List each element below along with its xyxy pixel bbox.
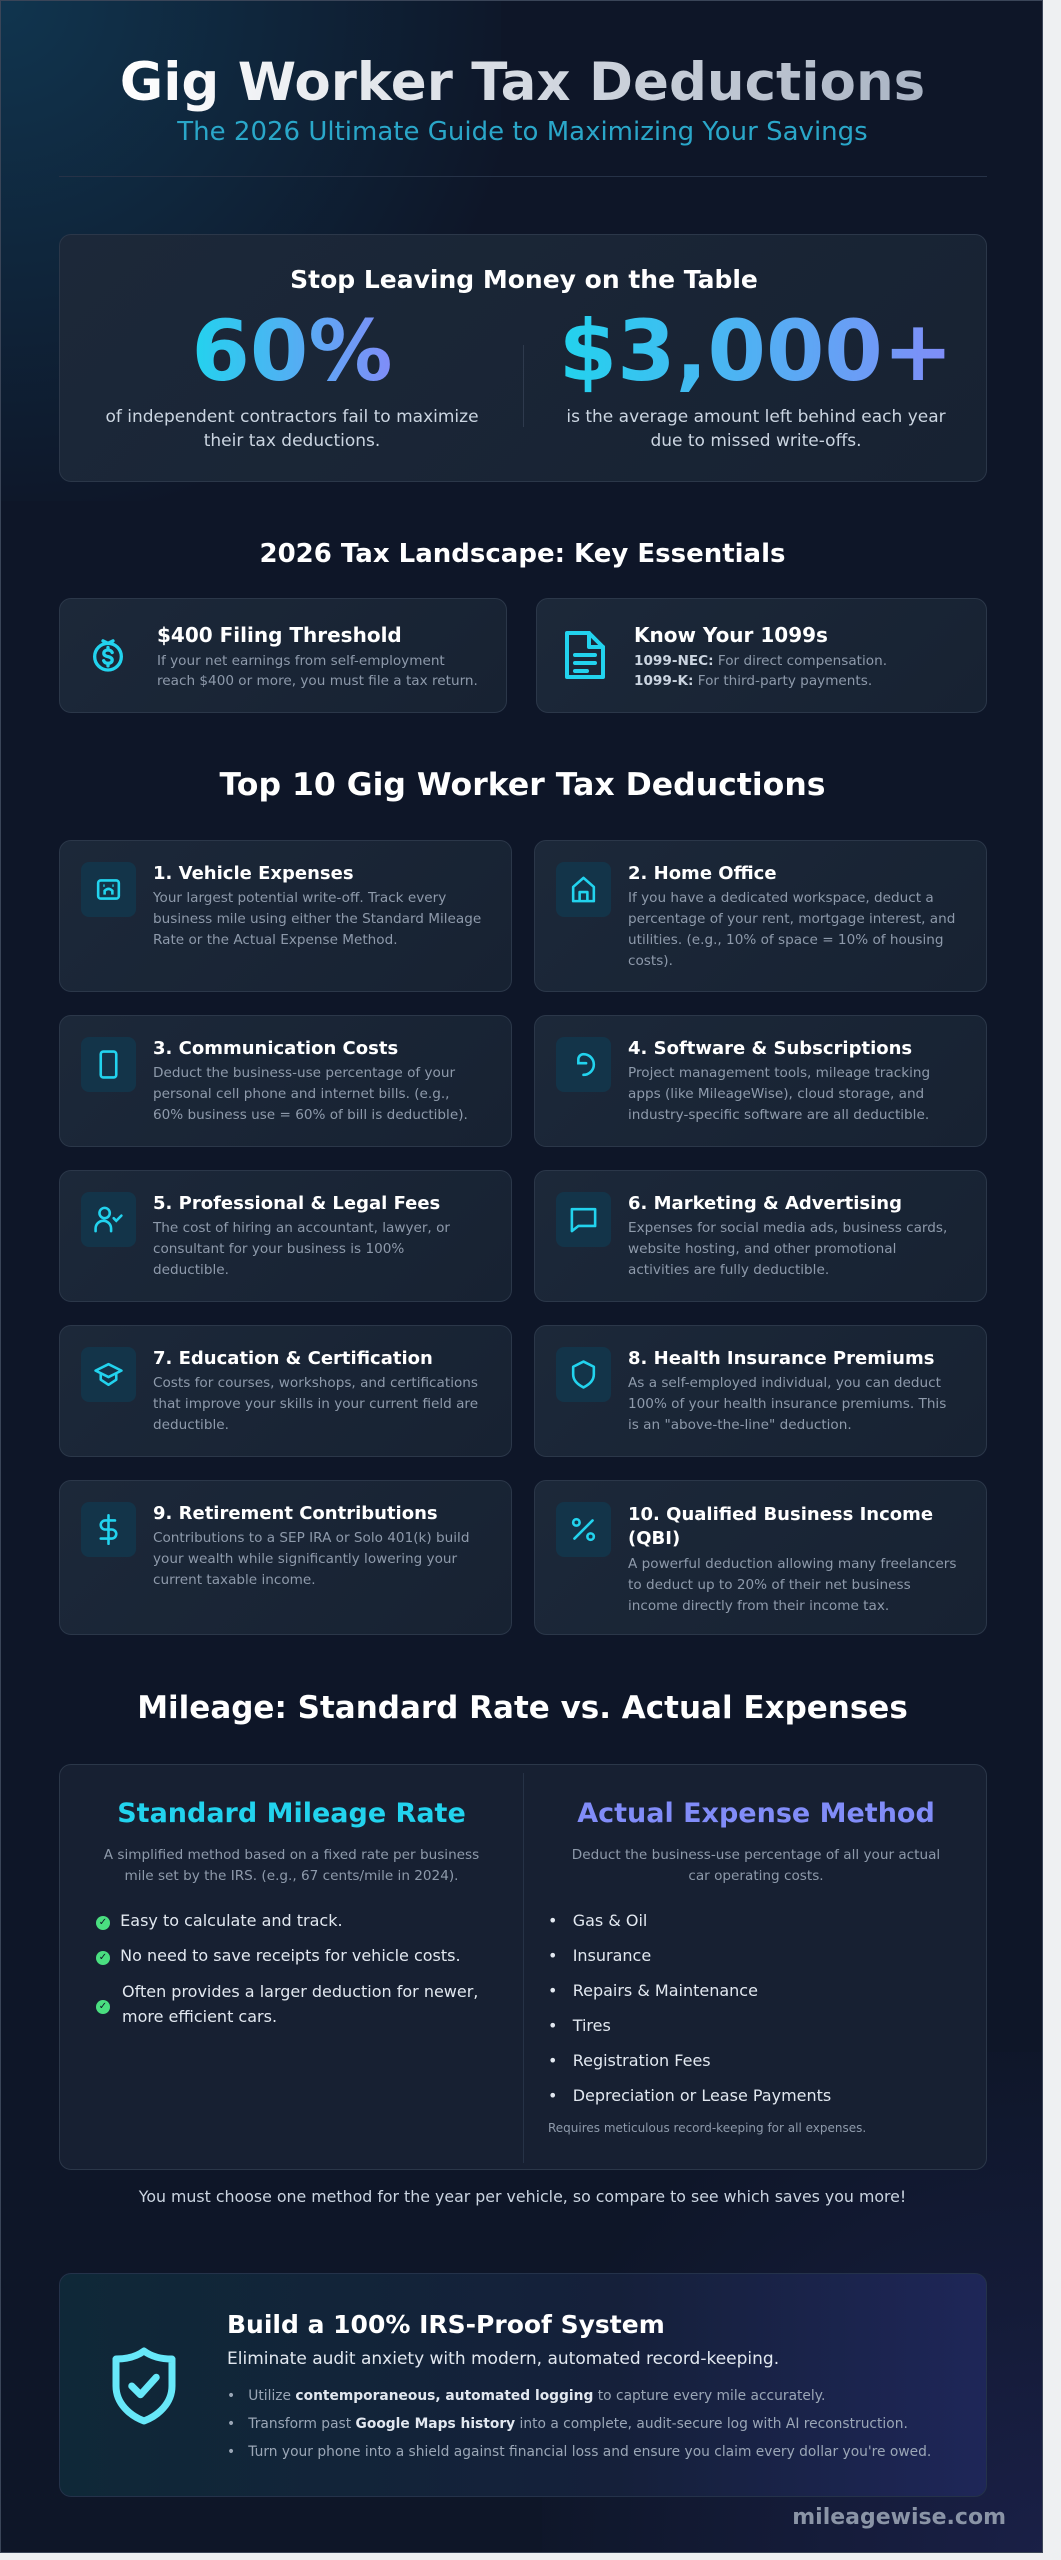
card 4: software xyxy=(534,1015,987,1147)
icon: speech bubble xyxy=(556,1192,611,1247)
card 5: professional: deductible. xyxy=(153,1262,229,1278)
heading: mileage: Mileage: Standard Rate vs. Actual Expenses xyxy=(137,1690,908,1726)
expense list xyxy=(548,1911,831,2105)
footer brand: mileagewise.com xyxy=(792,2505,1006,2530)
card: 1099s: Know Your 1099s xyxy=(634,623,828,647)
checklist: ✓ xyxy=(99,2001,107,2012)
card 1: vehicle: 1. Vehicle Expenses xyxy=(153,863,354,884)
card 7: education: Costs for courses, workshops, and certifications xyxy=(153,1375,478,1391)
column: actual expense: Requires meticulous record-keeping for all expenses. xyxy=(548,2121,866,2135)
card 8: health xyxy=(534,1325,987,1457)
stat: $3,000+ xyxy=(559,302,953,451)
card 9: retirement: 9. Retirement Contributions xyxy=(153,1503,438,1524)
stat: 60% xyxy=(105,302,479,451)
card 9: retirement: your wealth while significantly lowering your xyxy=(153,1551,457,1567)
card 10: QBI: income directly from their income tax. xyxy=(628,1598,889,1614)
checklist: Often provides a larger deduction for newer, xyxy=(122,1982,478,2001)
stats heading: Stop Leaving Money on the Table xyxy=(290,265,758,294)
column: actual expense: Actual Expense Method xyxy=(577,1798,935,1829)
card 4: software: industry-specific software are all deductible. xyxy=(628,1107,929,1123)
column: standard mileage: more efficient cars. xyxy=(122,2007,277,2026)
card 9: retirement: current taxable income. xyxy=(153,1572,316,1588)
card 6: marketing: Expenses for social media ads, business cards, xyxy=(628,1220,947,1236)
footnote: You must choose one method for the year per vehicle, so compare to see which saves you more! xyxy=(139,2187,906,2206)
card 10: QBI xyxy=(534,1480,987,1635)
column: actual expense: Deduct the business-use percentage of all your actual xyxy=(572,1847,940,1863)
card 4: software: Project management tools, mileage tracking xyxy=(628,1065,930,1081)
card: filing threshold: $400 Filing Threshold xyxy=(157,623,402,647)
panel: stats xyxy=(59,234,987,482)
icon: vehicle xyxy=(81,862,136,917)
card 8: health: As a self-employed individual, you can deduct xyxy=(628,1375,941,1391)
expense list: • Gas & Oil xyxy=(548,1911,647,1930)
stat: $3,000+: is the average amount left behind each year xyxy=(566,407,946,427)
card 3: communication: Deduct the business-use percentage of your xyxy=(153,1065,455,1081)
card 1: vehicle: business mile using either the Standard Mileage xyxy=(153,911,481,927)
card 7: education: that improve your skills in your current field are xyxy=(153,1396,478,1412)
card 10: QBI: to deduct up to 20% of their net business xyxy=(628,1577,911,1593)
icon: phone xyxy=(81,1037,136,1092)
card 1: vehicle: Rate or the Actual Expense Method. xyxy=(153,932,398,948)
expense list: • Registration Fees xyxy=(548,2051,711,2070)
icon: document xyxy=(565,631,605,679)
checklist xyxy=(96,1911,478,2026)
CTA bullets: • Turn your phone into a shield against financial loss and ensure you claim every dollar you're owed. xyxy=(227,2444,931,2460)
card 3: communication: 3. Communication Costs xyxy=(153,1038,398,1059)
card 4: software: apps (like MileageWise), cloud storage, and xyxy=(628,1086,924,1102)
stat: 60%: of independent contractors fail to maximize xyxy=(105,407,479,427)
column: standard mileage: Standard Mileage Rate xyxy=(117,1798,466,1829)
panel: CTA: Eliminate audit anxiety with modern, automated record-keeping. xyxy=(227,2349,779,2369)
card: filing threshold: reach $400 or more, you must file a tax return. xyxy=(157,673,478,689)
card 2: home office: costs). xyxy=(628,953,673,969)
icon: shield check xyxy=(112,2347,176,2424)
expense list: • Tires xyxy=(548,2016,611,2035)
panel: comparison xyxy=(59,1764,987,2170)
card 6: marketing: website hosting, and other promotional xyxy=(628,1241,896,1257)
card 10: QBI: (QBI) xyxy=(628,1528,680,1549)
column: standard mileage xyxy=(96,1798,479,2026)
card 2: home office: 2. Home Office xyxy=(628,863,777,884)
card 7: education: deductible. xyxy=(153,1417,229,1433)
card: filing threshold xyxy=(59,598,507,713)
panel: CTA xyxy=(59,2273,987,2497)
card 5: professional: The cost of hiring an accountant, lawyer, or xyxy=(153,1220,450,1236)
card 6: marketing: 6. Marketing & Advertising xyxy=(628,1193,902,1214)
card 7: education xyxy=(59,1325,512,1457)
column: actual expense: car operating costs. xyxy=(688,1868,824,1884)
icon: house xyxy=(556,862,611,917)
checklist: ✓ xyxy=(99,1952,107,1963)
card 8: health: is an "above-the-line" deduction. xyxy=(628,1417,852,1433)
card 5: professional xyxy=(59,1170,512,1302)
card 2: home office xyxy=(534,840,987,992)
CTA bullets xyxy=(227,2388,931,2460)
card 1: vehicle: Your largest potential write-off. Track every xyxy=(153,890,446,906)
CTA bullets: • Utilize contemporaneous, automated logging to capture every mile accurately. xyxy=(227,2388,825,2404)
card 5: professional: 5. Professional & Legal Fees xyxy=(153,1193,440,1214)
icon: dollar xyxy=(81,1502,136,1557)
icon: graduation cap xyxy=(81,1347,136,1402)
icon: shield xyxy=(556,1347,611,1402)
expense list: • Depreciation or Lease Payments xyxy=(548,2086,831,2105)
checklist: No need to save receipts for vehicle costs. xyxy=(120,1946,461,1965)
expense list: • Insurance xyxy=(548,1946,651,1965)
icon: percent xyxy=(556,1502,611,1557)
card 2: home office: percentage of your rent, mortgage interest, and xyxy=(628,911,955,927)
card 7: education: 7. Education & Certification xyxy=(153,1348,433,1369)
column: actual expense xyxy=(548,1798,940,2135)
card 1: vehicle xyxy=(59,840,512,992)
card 6: marketing: activities are fully deductible. xyxy=(628,1262,829,1278)
icon: user check xyxy=(81,1192,136,1247)
icon: pie xyxy=(556,1037,611,1092)
card 3: communication xyxy=(59,1015,512,1147)
card 10: QBI: 10. Qualified Business Income xyxy=(628,1504,933,1525)
CTA bullets: • Transform past Google Maps history into a complete, audit-secure log with AI reconstruction. xyxy=(227,2416,908,2432)
card 3: communication: personal cell phone and internet bills. (e.g., xyxy=(153,1086,450,1102)
column: standard mileage: A simplified method based on a fixed rate per business xyxy=(104,1847,479,1863)
card 6: marketing xyxy=(534,1170,987,1302)
card 9: retirement: Contributions to a SEP IRA or Solo 401(k) build xyxy=(153,1530,469,1546)
column: standard mileage: mile set by the IRS. (e.g., 67 cents/mile in 2024). xyxy=(124,1868,458,1884)
checklist: Easy to calculate and track. xyxy=(120,1911,343,1930)
card 4: software: 4. Software & Subscriptions xyxy=(628,1038,912,1059)
card: 1099s: 1099-K: For third-party payments. xyxy=(634,673,872,689)
card 2: home office: If you have a dedicated workspace, deduct a xyxy=(628,890,934,906)
card: 1099s xyxy=(536,598,987,713)
checklist: ✓ xyxy=(99,1917,107,1928)
stat: 60%: 60% xyxy=(191,302,393,400)
subtitle: The 2026 Ultimate Guide to Maximizing Your Savings xyxy=(177,117,868,147)
card: 1099s: 1099-NEC: For direct compensation. xyxy=(634,653,887,669)
card 8: health: 100% of your health insurance premiums. This xyxy=(628,1396,946,1412)
card 8: health: 8. Health Insurance Premiums xyxy=(628,1348,934,1369)
heading: top 10: Top 10 Gig Worker Tax Deductions xyxy=(220,767,826,803)
stat: 60%: their tax deductions. xyxy=(204,431,380,451)
card: filing threshold: If your net earnings from self-employment xyxy=(157,653,445,669)
card 5: professional: consultant for your business is 100% xyxy=(153,1241,404,1257)
title: Gig Worker Tax Deductions xyxy=(120,52,925,113)
card 2: home office: utilities. (e.g., 10% of space = 10% of housing xyxy=(628,932,944,948)
stat: $3,000+: due to missed write-offs. xyxy=(650,431,862,451)
panel: CTA: Build a 100% IRS-Proof System xyxy=(227,2310,665,2339)
heading: landscape: 2026 Tax Landscape: Key Essentials xyxy=(260,539,785,569)
expense list: • Repairs & Maintenance xyxy=(548,1981,758,2000)
icon: dollar coin xyxy=(93,639,123,672)
card 10: QBI: A powerful deduction allowing many freelancers xyxy=(628,1556,956,1572)
card 3: communication: 60% business use = 60% of bill is deductible). xyxy=(153,1107,468,1123)
card 9: retirement xyxy=(59,1480,512,1635)
stat: $3,000+: $3,000+ xyxy=(559,302,953,400)
